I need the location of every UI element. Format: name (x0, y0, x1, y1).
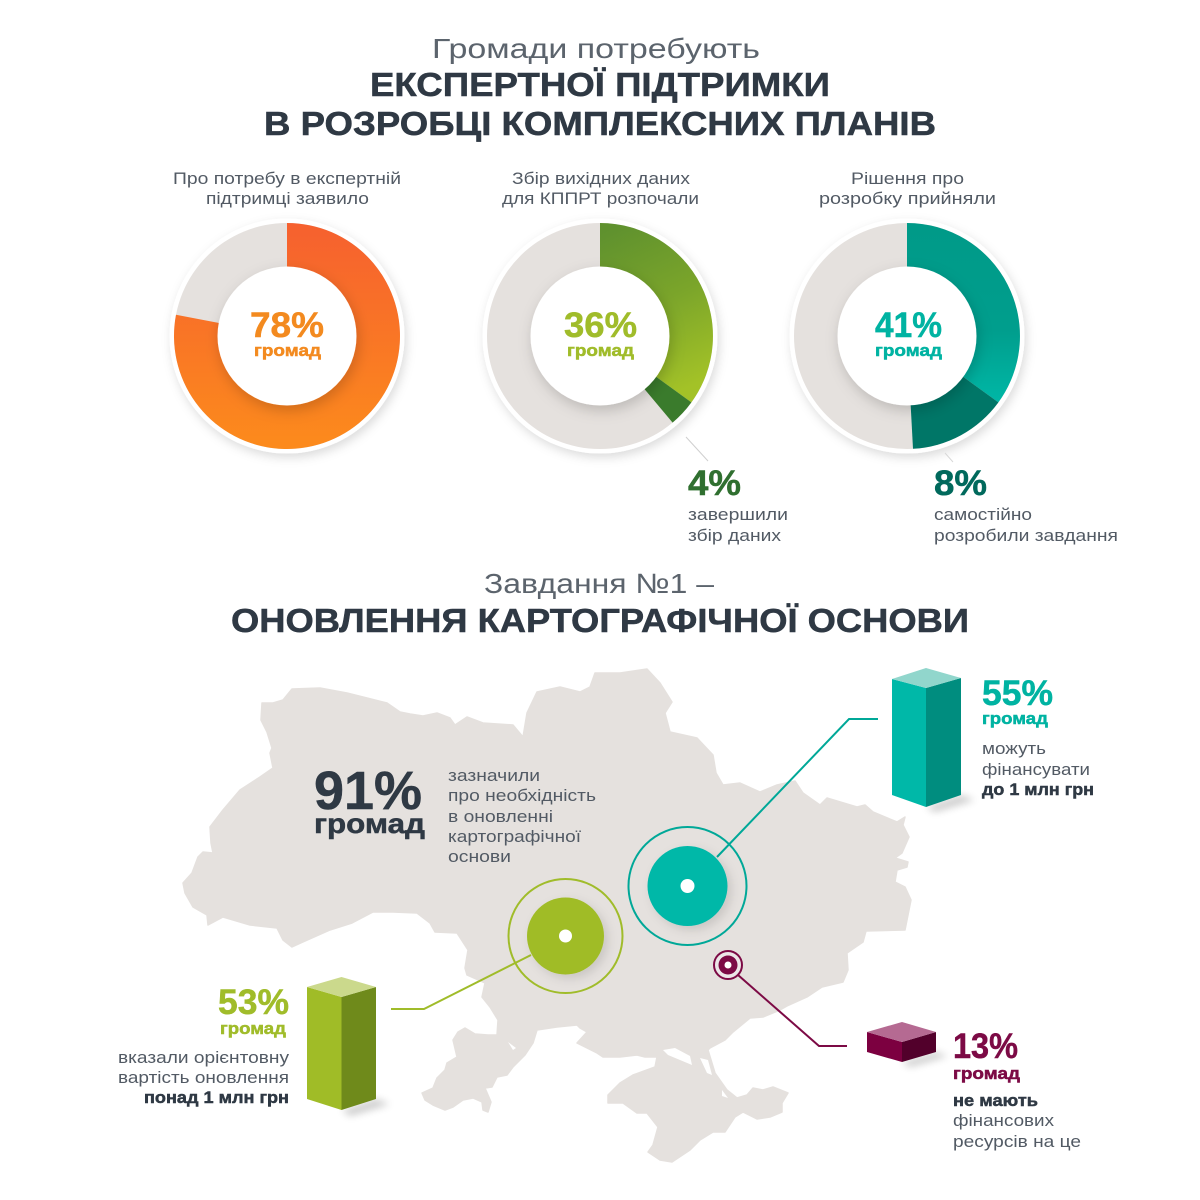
callout: 55%: 55% (982, 674, 1053, 713)
callout: 8%: 8% (934, 464, 987, 503)
callout: 55%: можуть (982, 739, 1046, 758)
callout: 55%: фінансувати (982, 760, 1090, 779)
donut value: громад (254, 341, 321, 360)
text block: 91% (314, 761, 596, 866)
callout: 53%: вказали орієнтовну (118, 1048, 290, 1067)
callout: 13%: громад (953, 1064, 1020, 1083)
text block: 91%: основи (448, 847, 511, 866)
text block: 91%: про необхідність (448, 786, 596, 805)
donut value: громад (567, 341, 634, 360)
donut caption: Про потребу в експертній (173, 169, 401, 188)
text block: 91%: зазначили (448, 766, 540, 785)
3D bar: maroon (867, 1022, 948, 1067)
donut value (564, 306, 637, 360)
section heading (231, 568, 969, 639)
donut caption: для КППРТ розпочали (502, 189, 699, 208)
section heading: Завдання №1 – (484, 568, 714, 599)
callout: 53%: понад 1 млн грн (144, 1088, 289, 1107)
3D bar: green (307, 977, 390, 1116)
callout: 53% (118, 983, 290, 1107)
text block: 91%: картографічної (448, 827, 581, 846)
marker: maroon (714, 951, 847, 1046)
text block: 91%: 91% (314, 761, 422, 821)
callout: 13%: не мають (953, 1091, 1038, 1110)
callout: 8%: розробили завдання (934, 526, 1118, 545)
map of Ukraine (183, 669, 911, 1162)
donut chart 41% (790, 218, 1024, 454)
donut caption: Збір вихідних даних (512, 169, 691, 188)
panel: donut 36% data collection (482, 169, 788, 545)
marker: green (391, 879, 622, 1009)
donut value: 36% (564, 306, 637, 345)
text block: 91%: громад (314, 808, 425, 839)
callout: 13%: ресурсів на це (953, 1132, 1081, 1151)
donut caption: підтримці заявило (206, 189, 369, 208)
callout: 53%: 53% (218, 983, 289, 1022)
callout: 4%: 4% (688, 464, 741, 503)
title (264, 33, 936, 142)
donut caption (502, 169, 699, 208)
title: ЕКСПЕРТНОЇ ПІДТРИМКИ (370, 66, 830, 103)
section heading: ОНОВЛЕННЯ КАРТОГРАФІЧНОЇ ОСНОВИ (231, 602, 969, 639)
title: В РОЗРОБЦІ КОМПЛЕКСНИХ ПЛАНІВ (264, 105, 936, 142)
donut value: громад (875, 341, 942, 360)
callout: 53%: громад (220, 1019, 286, 1038)
3D bar: teal (892, 668, 975, 812)
callout: 13% (953, 1027, 1081, 1151)
donut value (250, 306, 324, 360)
callout: 4%: завершили (688, 505, 788, 524)
callout: 4%: збір даних (688, 526, 782, 545)
donut caption (173, 169, 401, 208)
donut value: 41% (875, 306, 942, 345)
donut caption: Рішення про (851, 169, 964, 188)
callout: 55%: до 1 млн грн (982, 780, 1094, 799)
donut caption (819, 169, 996, 208)
callout: 53%: вартість оновлення (118, 1068, 289, 1087)
text block: 91%: в оновленні (448, 807, 553, 826)
donut caption: розробку прийняли (819, 189, 996, 208)
callout: 8% (934, 453, 1118, 545)
callout: 13%: 13% (953, 1027, 1018, 1066)
callout: 55%: громад (982, 709, 1048, 728)
panel: donut 78% expert support (170, 169, 404, 454)
donut chart 36% (482, 218, 718, 454)
donut chart 78% (170, 218, 404, 454)
callout: 13%: фінансових (953, 1111, 1055, 1130)
panel: donut 41% decision (790, 169, 1118, 545)
title: Громади потребують (432, 33, 760, 64)
marker: teal (628, 719, 878, 945)
callout: 8%: самостійно (934, 505, 1032, 524)
callout: 55% (982, 674, 1094, 799)
callout: 4% (686, 437, 788, 545)
donut value: 78% (250, 306, 324, 345)
